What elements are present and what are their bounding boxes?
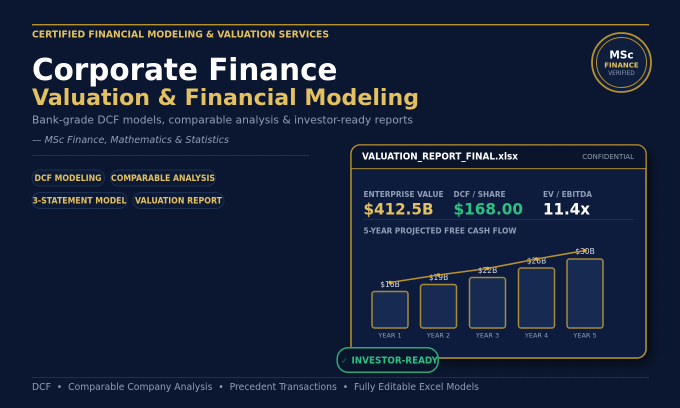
bar: year 2 xyxy=(420,273,456,340)
badge: MSc Finance verified: MSc xyxy=(609,50,634,62)
metric: EV / EBITDA: 11.4x xyxy=(543,200,591,218)
bar: year 3 xyxy=(470,266,506,340)
panel header: CONFIDENTIAL xyxy=(582,153,634,161)
chart heading: 5-YEAR PROJECTED FREE CASH FLOW xyxy=(364,226,517,236)
bar: year 5: $30B xyxy=(575,247,595,256)
panel: valuation report xyxy=(351,145,646,358)
bar: year 3: YEAR 3 xyxy=(475,332,499,340)
badge: investor-ready: ✓ xyxy=(341,356,348,366)
tag: comparable analysis xyxy=(110,170,216,186)
bar: year 5 xyxy=(567,247,603,340)
tag: 3-statement model: 3-STATEMENT MODEL xyxy=(32,196,127,206)
tags xyxy=(32,170,224,208)
metric: DCF per share xyxy=(454,190,523,218)
tag: valuation report: VALUATION REPORT xyxy=(135,196,222,206)
bar: year 2: $19B xyxy=(429,273,448,282)
bar chart: free cash flow xyxy=(372,247,603,340)
footer services list: DCF • Comparable Company Analysis • Precedent Transactions • Fully Editable Excel Models xyxy=(32,382,479,393)
tag: DCF modeling: DCF MODELING xyxy=(34,174,102,184)
metric: enterprise value xyxy=(364,190,444,218)
badge: MSc Finance verified xyxy=(592,33,651,92)
bar: year 5: YEAR 5 xyxy=(572,332,597,340)
tag: 3-statement model xyxy=(32,192,127,208)
metric: DCF per share: DCF / SHARE xyxy=(454,190,506,199)
bar: year 1: YEAR 1 xyxy=(377,332,402,340)
eyebrow heading: CERTIFIED FINANCIAL MODELING & VALUATION SERVICES xyxy=(32,30,329,40)
metric: EV / EBITDA xyxy=(543,190,593,218)
top rule xyxy=(32,24,649,25)
bar: year 4: YEAR 4 xyxy=(524,332,548,340)
credentials: — MSc Finance, Mathematics & Statistics xyxy=(32,135,229,146)
badge: MSc Finance verified: VERIFIED xyxy=(608,71,635,77)
badge: investor-ready: INVESTOR-READY xyxy=(352,356,439,366)
metric: enterprise value: ENTERPRISE VALUE xyxy=(364,190,444,199)
bar: year 1: $16B xyxy=(380,280,400,289)
metric: DCF per share: $168.00 xyxy=(454,200,523,218)
title: Corporate Finance xyxy=(32,53,338,88)
bar: year 4: $26B xyxy=(527,256,546,266)
metric: enterprise value: $412.5B xyxy=(364,200,434,218)
metric: EV / EBITDA: EV / EBITDA xyxy=(543,190,593,199)
bar: year 4 xyxy=(518,256,554,340)
tag: comparable analysis: COMPARABLE ANALYSIS xyxy=(111,174,215,184)
bar: year 2: YEAR 2 xyxy=(426,332,450,340)
tag: DCF modeling xyxy=(32,170,104,186)
panel header xyxy=(351,146,646,169)
description: Bank-grade DCF models, comparable analysis & investor-ready reports xyxy=(32,114,413,126)
bar: year 1 xyxy=(372,280,408,340)
badge: MSc Finance verified: FINANCE xyxy=(604,62,639,70)
badge: investor-ready xyxy=(337,348,439,372)
bar: year 3: $22B xyxy=(478,266,497,275)
tag: valuation report xyxy=(133,192,224,208)
panel header: VALUATION_REPORT_FINAL.xlsx xyxy=(362,152,519,162)
trend line xyxy=(388,249,587,284)
subtitle: Valuation & Financial Modeling xyxy=(32,85,419,111)
